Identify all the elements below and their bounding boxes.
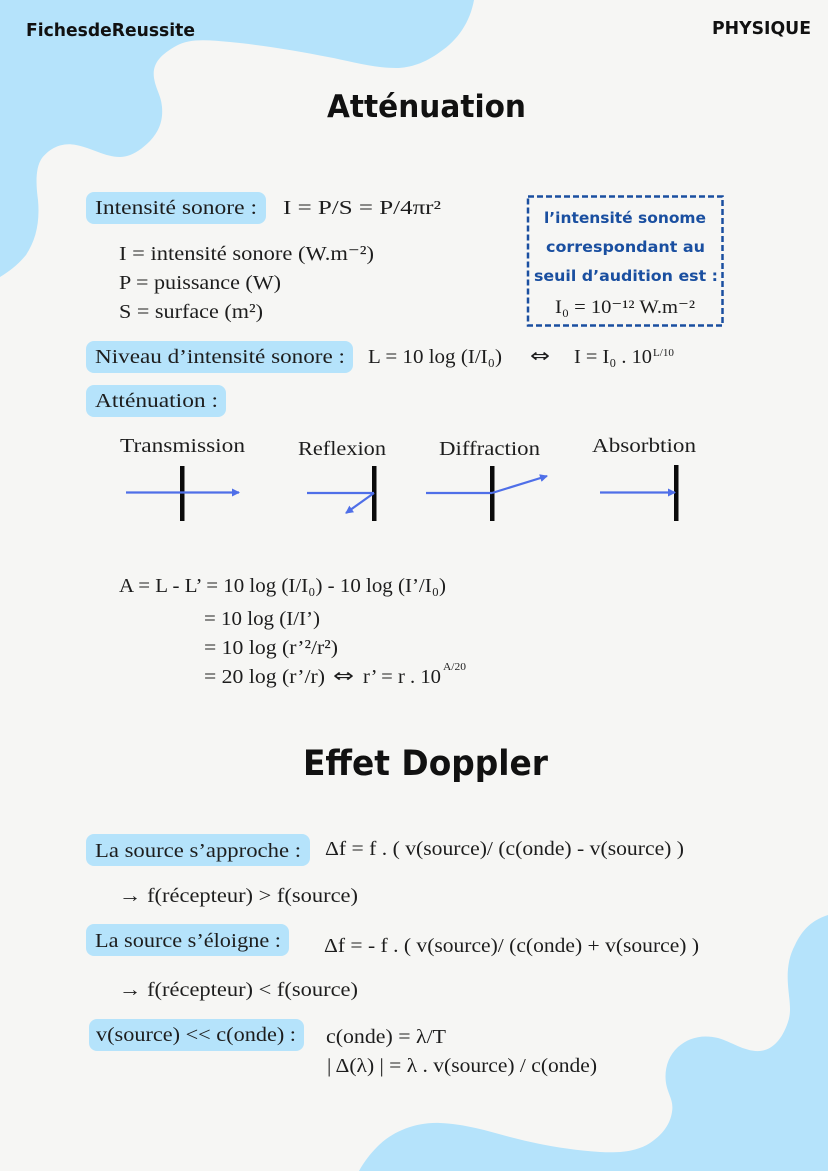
equations: attenuation: r’ = r . 10: [363, 666, 441, 688]
pill: niveau: [86, 341, 353, 373]
definitions list: I = intensité sonore (W.m⁻²): [119, 243, 374, 265]
pill: intensité sonore: [86, 192, 266, 224]
diagram: reflexion: [298, 438, 386, 521]
pill: source éloigne: La source s’éloigne :: [95, 930, 281, 952]
pill: source approche: La source s’approche :: [95, 840, 301, 862]
subject label: PHYSIQUE: [712, 18, 811, 39]
equations: attenuation: A/20: [443, 661, 467, 673]
formula: wavelength shift: | Δ(λ) | = λ . v(source) / c(onde): [327, 1055, 597, 1077]
section: niveau d'intensité sonore: [86, 341, 674, 373]
equivalence sign: ⇔: [530, 345, 550, 367]
pill: atténuation: [86, 385, 226, 417]
diagram: transmission: [120, 435, 245, 521]
blob: bottom right: [359, 915, 828, 1171]
formula: level: L = 10 log (I/I₀): [368, 346, 502, 368]
result: approach: → f(récepteur) > f(source): [119, 885, 358, 907]
pill: atténuation: Atténuation :: [95, 390, 218, 412]
pill: source approche: [86, 834, 310, 866]
pill: v source: v(source) << c(onde) :: [96, 1024, 296, 1046]
equations: attenuation: ⇔: [333, 665, 354, 687]
diagram: absorbtion: [592, 435, 696, 521]
title: Atténuation: Atténuation: [327, 89, 526, 125]
title: Effet Doppler: Effet Doppler: [303, 744, 549, 784]
diagram: transmission: Transmission: [120, 435, 245, 457]
pill: v source: [89, 1019, 304, 1051]
definitions list: [119, 243, 374, 323]
callout: seuil d'audition: correspondant au: [546, 238, 705, 256]
diagram: absorbtion: Absorbtion: [592, 435, 696, 457]
diagram: diffraction: Diffraction: [439, 438, 540, 460]
equations: attenuation: = 10 log (I/I’): [204, 608, 320, 630]
pill: source éloigne: [86, 924, 289, 956]
formula: inverse: I = I₀ . 10: [574, 346, 652, 368]
pill: intensité sonore: Intensité sonore :: [95, 197, 257, 219]
brand name: FichesdeReussite: [26, 20, 195, 41]
formula: approach: Δf = f . ( v(source)/ (c(onde) - v(source) ): [325, 838, 684, 860]
section: la source s'éloigne: [86, 924, 699, 1001]
section: v(source) much less than c(onde): [89, 1019, 597, 1077]
equations: attenuation: = 10 log (r’²/r²): [204, 637, 338, 659]
equations: attenuation: A = L - L’ = 10 log (I/I₀) - 10 log (I’/I₀): [119, 575, 446, 597]
diagram: reflexion: Reflexion: [298, 438, 386, 460]
definitions list: P = puissance (W): [119, 272, 281, 294]
diagram: diffraction: [426, 438, 547, 521]
result: recede: → f(récepteur) < f(source): [119, 979, 358, 1001]
pill: niveau: Niveau d’intensité sonore :: [95, 346, 345, 368]
callout: seuil d'audition: [528, 196, 722, 326]
callout: seuil d'audition: I₀ = 10⁻¹² W.m⁻²: [555, 297, 695, 318]
formula: wave speed: c(onde) = λ/T: [326, 1026, 447, 1048]
section: la source s'approche: [86, 834, 684, 907]
callout: seuil d'audition: l’intensité sonome: [544, 209, 706, 227]
formula: intensity: I = P/S = P/4πr²: [283, 198, 441, 219]
formula: recede: Δf = - f . ( v(source)/ (c(onde) + v(source) ): [324, 935, 699, 957]
equations: attenuation: [119, 575, 467, 688]
blob: top left: [0, 0, 474, 277]
equations: attenuation: = 20 log (r’/r): [204, 666, 325, 688]
definitions list: S = surface (m²): [119, 301, 263, 323]
callout: seuil d'audition: seuil d’audition est :: [534, 267, 718, 285]
section: intensité sonore: [86, 192, 441, 323]
formula: inverse: L/10: [653, 347, 674, 359]
